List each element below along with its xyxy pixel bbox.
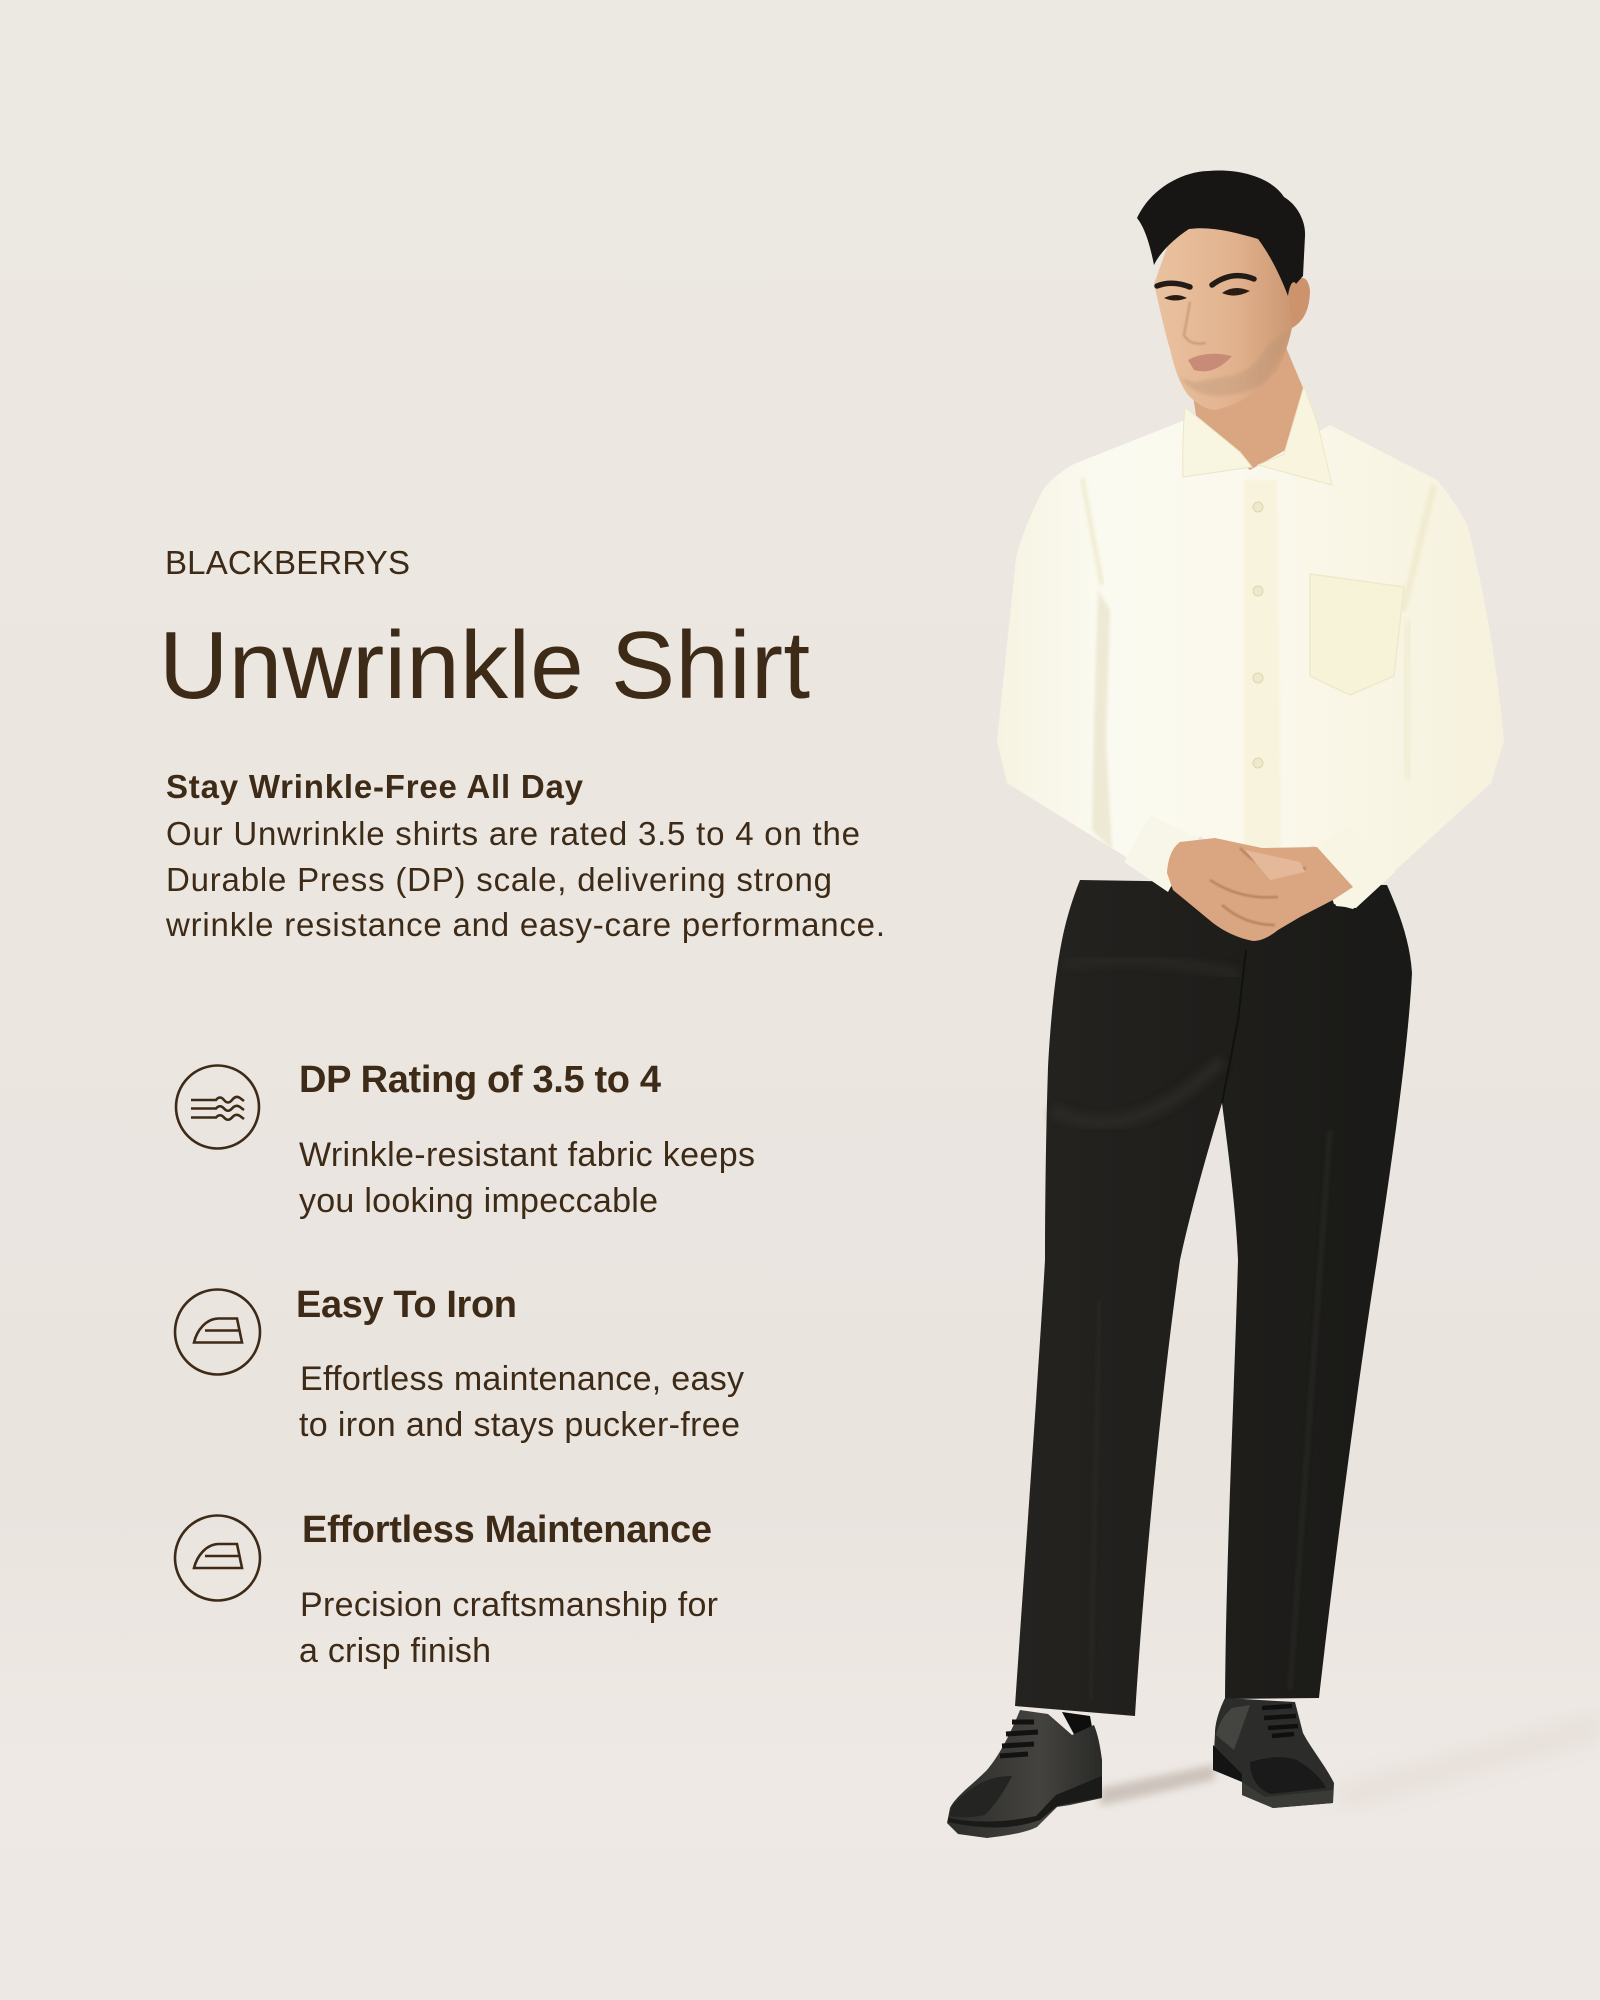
ear	[1288, 278, 1310, 328]
brand label: BLACKBERRYS	[165, 544, 410, 581]
model photo illustration	[947, 170, 1504, 1838]
buttons	[1253, 502, 1263, 768]
description: to iron and stays pucker-free	[299, 1406, 740, 1444]
description: Precision craftsmanship for	[300, 1586, 718, 1624]
hands	[1167, 838, 1353, 941]
icon: iron in circle	[175, 1516, 260, 1600]
shoe left	[947, 1710, 1102, 1838]
description: a crisp finish	[299, 1632, 491, 1670]
pocket	[1310, 574, 1404, 695]
heading: DP Rating of 3.5 to 4	[299, 1059, 661, 1101]
nose and mouth	[1184, 302, 1206, 344]
intro line 1: Our Unwrinkle shirts are rated 3.5 to 4 on the	[166, 815, 860, 852]
stubble	[1180, 330, 1288, 396]
cuffs	[1124, 815, 1198, 892]
feature: easy to iron	[175, 1284, 744, 1444]
placket	[1244, 480, 1281, 860]
shirt	[997, 386, 1504, 909]
intro heading: Stay Wrinkle-Free All Day	[166, 768, 584, 805]
brows	[1157, 276, 1254, 287]
icon: waves in circle	[176, 1066, 259, 1148]
eyes	[1164, 288, 1250, 300]
intro line 2: Durable Press (DP) scale, delivering strong	[166, 861, 832, 898]
description: Effortless maintenance, easy	[300, 1360, 744, 1398]
neck	[1192, 345, 1306, 470]
description: you looking impeccable	[299, 1182, 658, 1220]
feature: effortless maintenance	[175, 1509, 718, 1670]
intro line 3: wrinkle resistance and easy-care performance.	[165, 906, 885, 943]
hair	[1137, 170, 1305, 296]
intro text block	[165, 768, 885, 943]
collar	[1183, 386, 1332, 485]
trousers	[1015, 880, 1412, 1716]
feature: DP rating	[176, 1059, 755, 1220]
sleeve shadow	[1092, 590, 1112, 850]
head	[1137, 170, 1310, 410]
icon: iron in circle	[175, 1290, 260, 1374]
description: Wrinkle-resistant fabric keeps	[299, 1136, 755, 1174]
heading: Effortless Maintenance	[302, 1509, 712, 1551]
title: Unwrinkle Shirt	[159, 612, 810, 719]
heading: Easy To Iron	[296, 1284, 517, 1326]
floor shadows	[1100, 1718, 1600, 1806]
shoe right	[1213, 1698, 1334, 1808]
